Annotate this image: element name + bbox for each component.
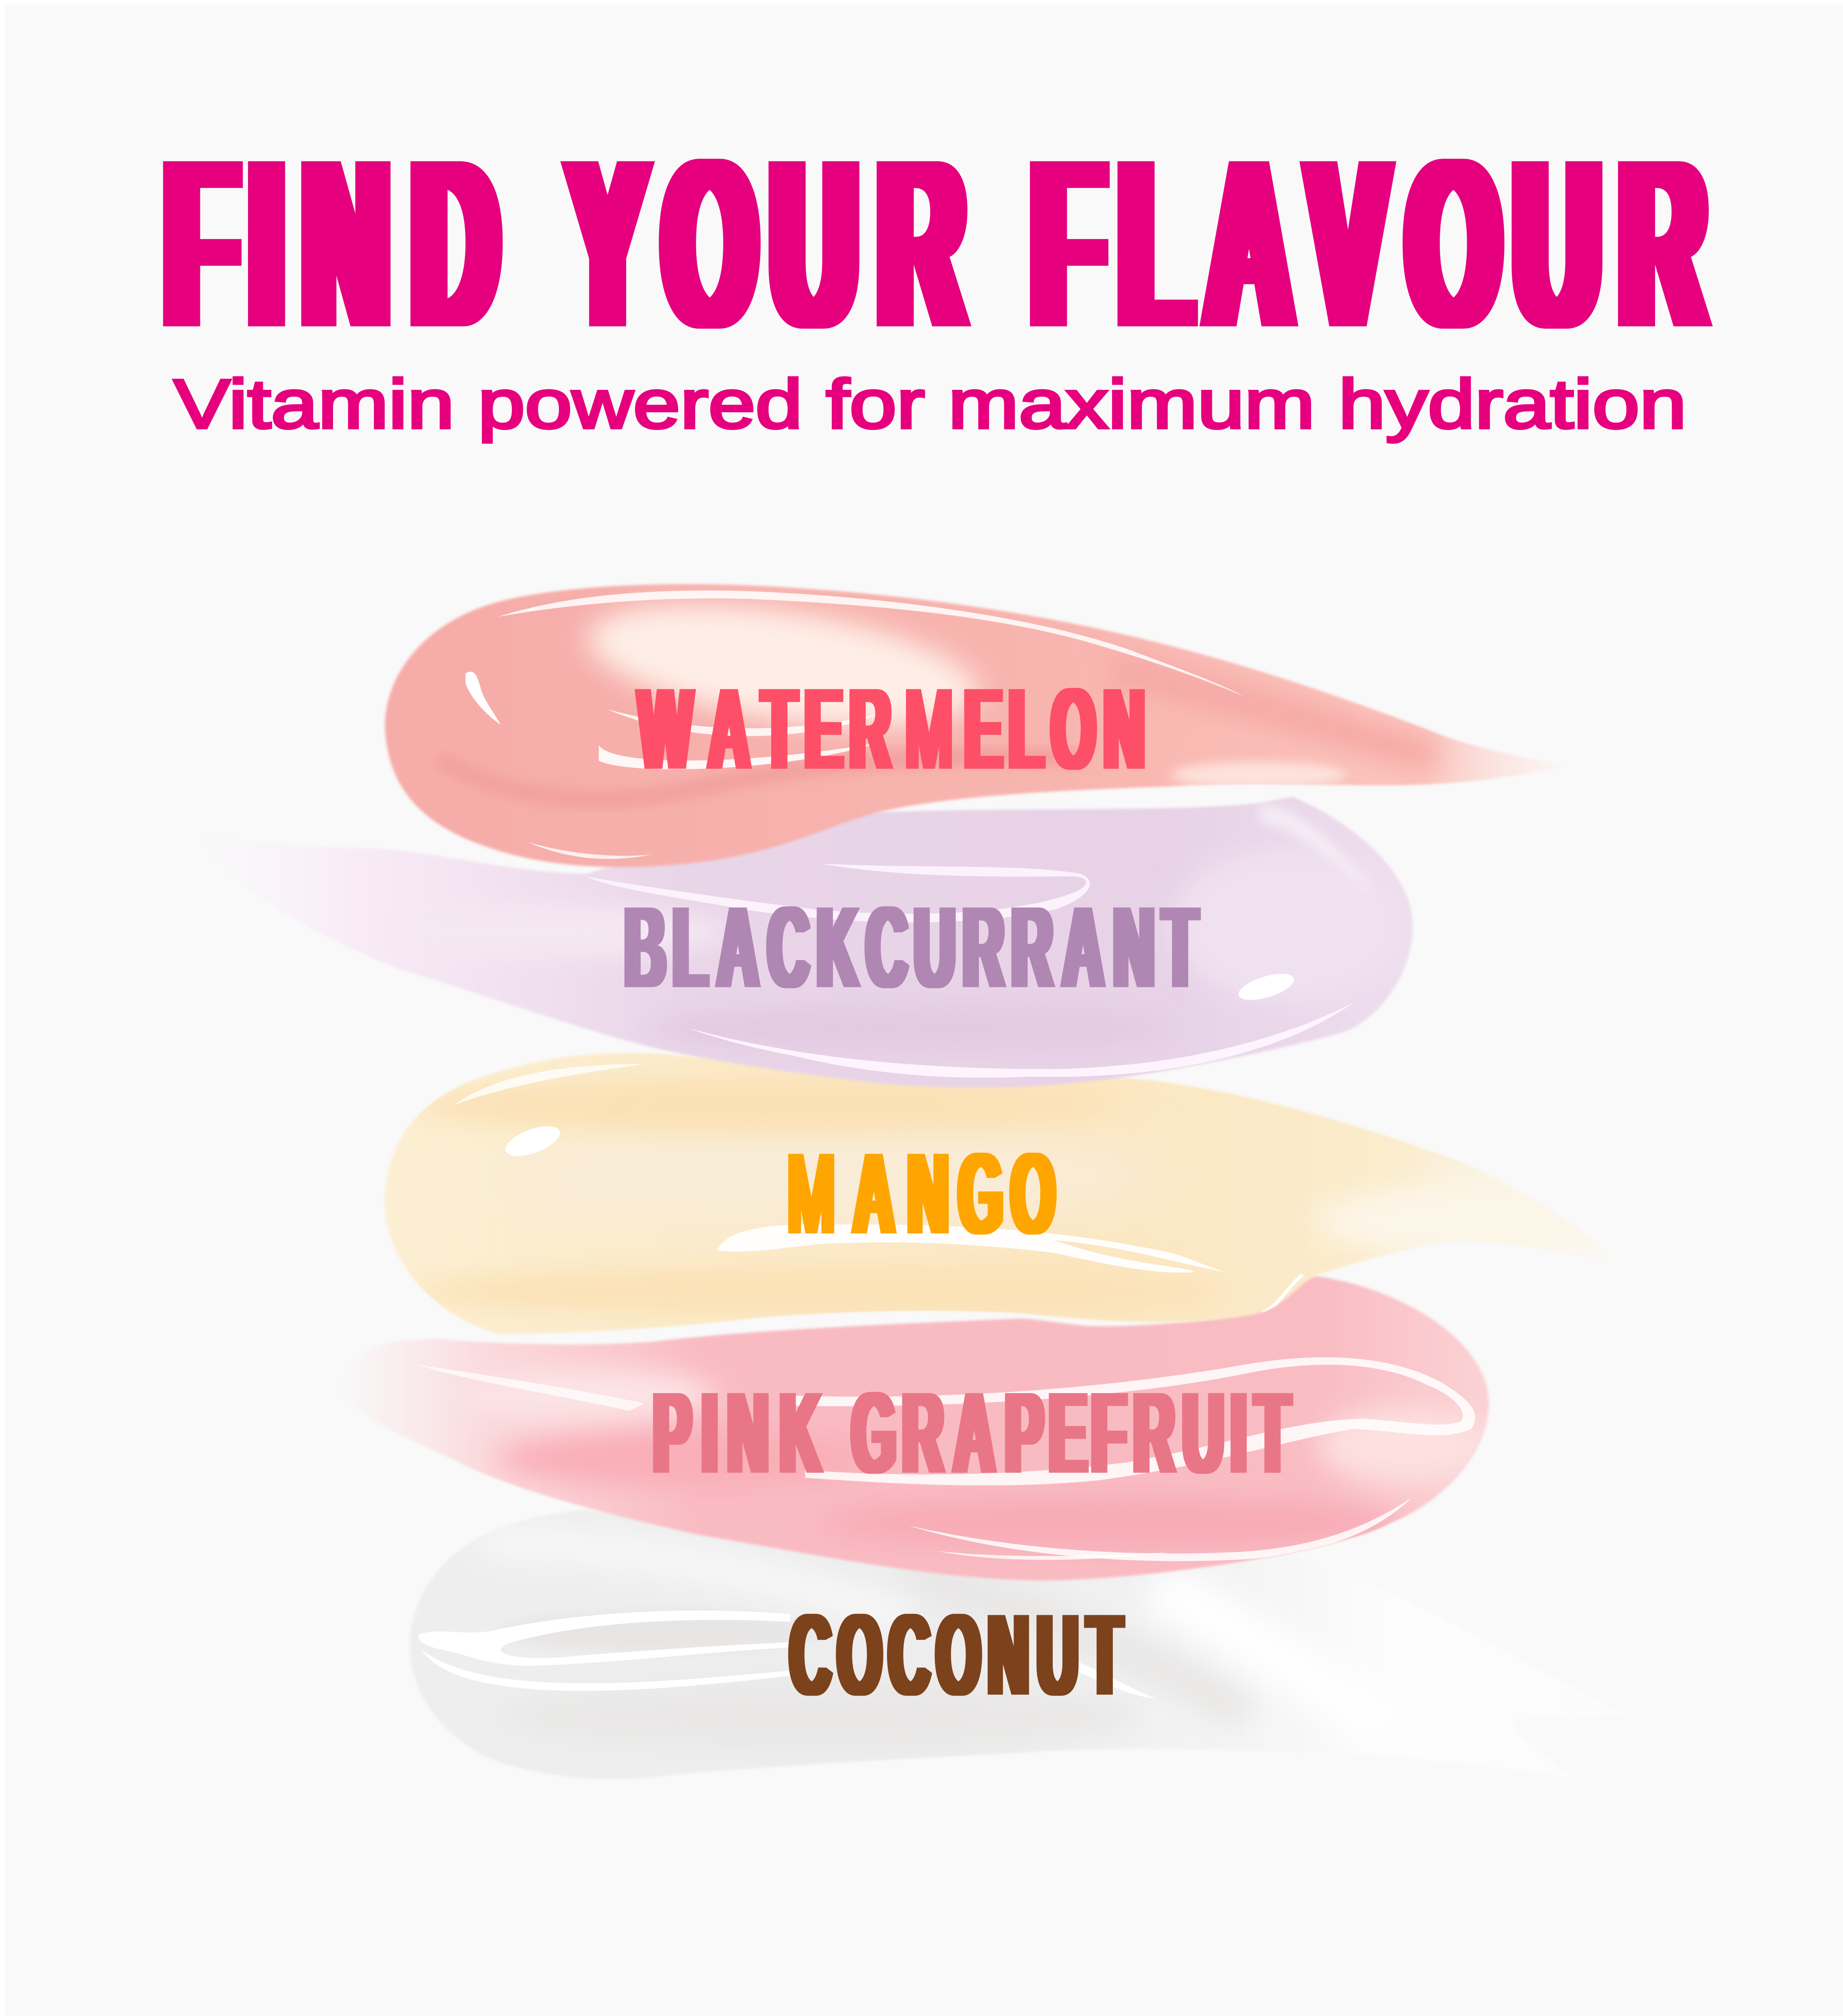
subtitle: Vitamin powered for maximum hydration [174, 365, 1687, 443]
label: pink grapefruit: PINK GRAPEFRUIT [653, 1368, 1290, 1497]
swatch: coconut [411, 1511, 1255, 1779]
label: blackcurrant: BLACKCURRANT [625, 882, 1197, 1012]
flavour labels [625, 664, 1290, 1719]
lip gloss swatches [304, 583, 1594, 1779]
label: watermelon: WATERMELON [639, 664, 1145, 793]
swatch: pink grapefruit [337, 1276, 1493, 1581]
swatch: mango [385, 1053, 1625, 1334]
label: coconut: COCONUT [790, 1590, 1122, 1719]
swatch: watermelon [385, 582, 1564, 867]
swatch: blackcurrant [190, 797, 1413, 1087]
label: mango: MANGO [787, 1129, 1055, 1258]
title: FIND YOUR FLAVOUR [165, 110, 1705, 377]
